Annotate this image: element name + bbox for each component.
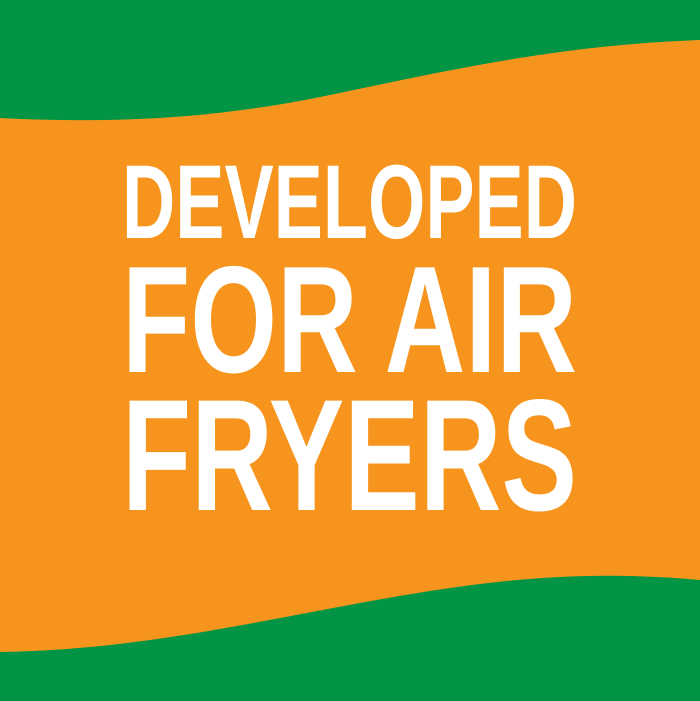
top green wave band xyxy=(0,0,700,120)
title text xyxy=(122,144,577,544)
bottom green wave band xyxy=(0,576,700,701)
